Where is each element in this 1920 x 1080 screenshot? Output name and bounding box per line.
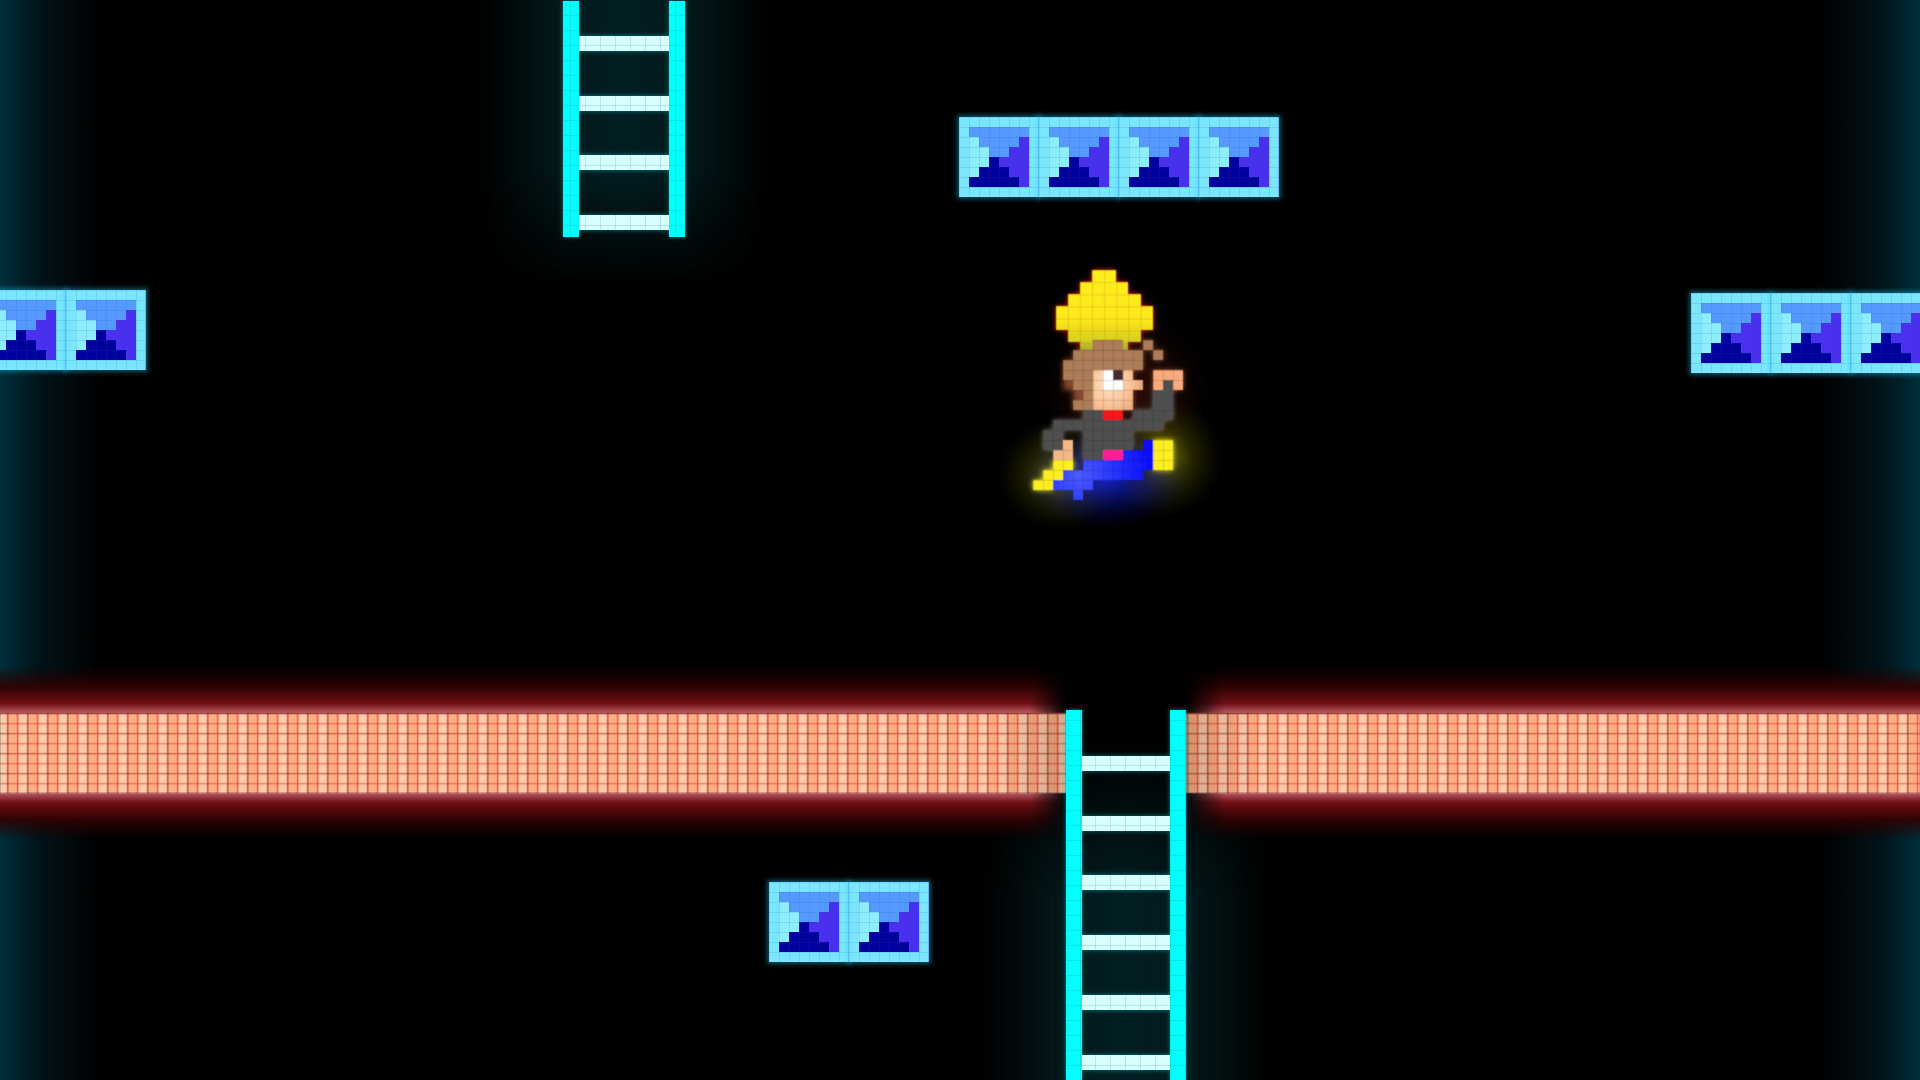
icon: yellow pointed hat bbox=[1056, 270, 1153, 352]
bottom ladder bbox=[1066, 710, 1186, 1080]
tight figure halo bbox=[1033, 340, 1183, 490]
eye pupil bbox=[1113, 370, 1123, 380]
red brick floor, left segment bbox=[0, 713, 1066, 793]
red bloom around head and hand bbox=[1040, 310, 1210, 470]
red neckerchief bbox=[1103, 410, 1123, 420]
left platform: two blocks bbox=[0, 288, 148, 372]
red floor glow bbox=[0, 666, 1920, 840]
blue bloom trousers bbox=[1020, 428, 1190, 528]
yellow boots bbox=[1033, 440, 1173, 490]
figure pixels bbox=[1033, 340, 1183, 500]
hair bbox=[1063, 340, 1163, 410]
right cyan edge glow bbox=[1820, 0, 1920, 1080]
red brick floor, right segment bbox=[1186, 713, 1920, 793]
left cyan edge glow bbox=[0, 0, 100, 1080]
character glow bbox=[998, 310, 1223, 530]
top platform: four blocks bbox=[957, 115, 1281, 199]
eye white bbox=[1103, 370, 1123, 390]
yellow bloom right boot bbox=[1103, 397, 1223, 517]
bottom ladder teal halo bbox=[1006, 779, 1246, 1080]
lower platform: two blocks bbox=[767, 880, 931, 964]
right platform: three blocks bbox=[1689, 291, 1920, 375]
lower hand bbox=[1053, 440, 1073, 460]
pink belt bbox=[1103, 450, 1123, 460]
character: jumping pixel figure with yellow hat bbox=[998, 270, 1223, 530]
raised hand bbox=[1153, 370, 1183, 390]
pixel grid overlay bbox=[1033, 340, 1183, 500]
yellow bloom left boot bbox=[998, 420, 1122, 530]
top ladder bbox=[563, 1, 685, 237]
dark button bbox=[1125, 412, 1131, 418]
blue trousers bbox=[1053, 440, 1153, 500]
hat glow bbox=[1056, 270, 1153, 352]
top ladder teal halo bbox=[504, 0, 744, 262]
face skin bbox=[1093, 370, 1143, 410]
grey jacket bbox=[1043, 380, 1173, 460]
